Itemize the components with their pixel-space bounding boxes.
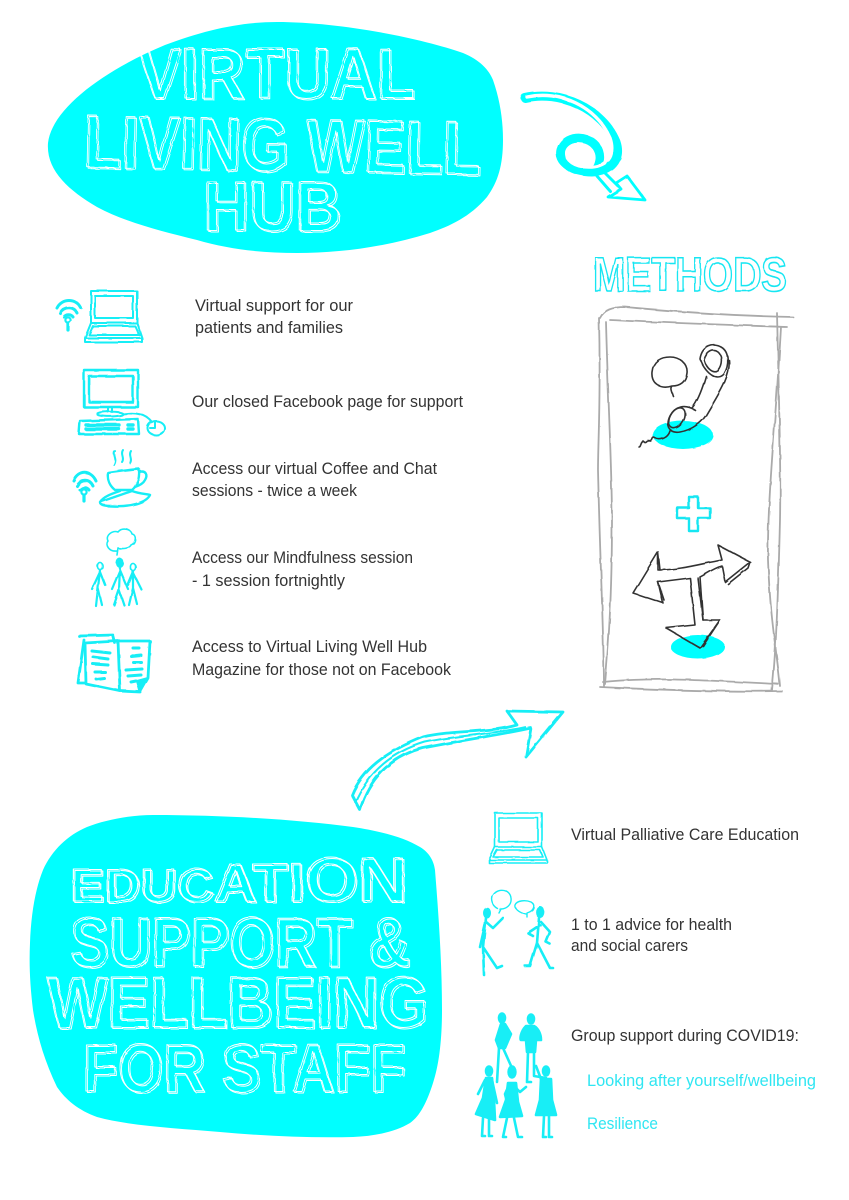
- icon: wifi and laptop: [57, 291, 142, 342]
- heading: Virtual Living Well Hub: VIRTUAL: [138, 35, 415, 114]
- list row: Mindfulness: - 1 session fortnightly: [192, 572, 346, 590]
- text: 1 to 1 advice: 1 to 1 advice for health: [571, 916, 732, 934]
- text: Coffee and Chat: Access our virtual Coffee and Chat: [192, 460, 437, 478]
- icon: desktop computer: [79, 370, 164, 435]
- panel: Virtual Living Well Hub title blob: [48, 22, 503, 253]
- icon: group of silhouettes: [476, 1014, 556, 1137]
- list row: Magazine: Magazine for those not on Facebook: [192, 661, 452, 679]
- text: group support heading: Group support during COVID19:: [571, 1027, 799, 1045]
- list row: Facebook page: [79, 370, 463, 435]
- text: virtual support: Virtual support for our: [195, 297, 353, 315]
- icon: telephone with speech bubble: [639, 345, 729, 449]
- text: looking after yourself: Looking after yourself/wellbeing: [587, 1072, 816, 1090]
- icon: open magazine: [78, 635, 150, 692]
- arrow: curly arrow to methods: [525, 95, 645, 200]
- icon: plus sign: [677, 497, 710, 531]
- list row: Mindfulness: [92, 529, 413, 606]
- list row: virtual support: [57, 291, 353, 342]
- heading: Education Support and Wellbeing for Staff: SUPPORT &: [70, 903, 410, 981]
- icon: laptop: [489, 813, 547, 863]
- heading: Virtual Living Well Hub: HUB: [203, 167, 341, 245]
- text: Mindfulness: Access our Mindfulness session: [192, 549, 413, 567]
- icon: three-way arrow: [633, 545, 750, 659]
- text: Palliative Care Education: Virtual Palliative Care Education: [571, 826, 799, 844]
- heading: Education Support and Wellbeing for Staff: FOR STAFF: [82, 1030, 405, 1106]
- heading: Virtual Living Well Hub: LIVING WELL: [83, 99, 481, 190]
- heading: Education Support and Wellbeing for Staff: EDUCATION: [70, 846, 407, 915]
- heading: Education Support and Wellbeing for Staff: WELLBEING: [47, 963, 428, 1043]
- list row: Coffee and Chat: [74, 450, 437, 506]
- list row: Coffee and Chat: sessions - twice a week: [192, 482, 358, 500]
- list row: group support: [476, 1014, 816, 1137]
- text: resilience: Resilience: [587, 1115, 658, 1133]
- text: Facebook page: Our closed Facebook page for support: [192, 393, 463, 411]
- list row: Palliative Care Education: [489, 813, 799, 863]
- panel: methods sketched frame: [598, 307, 793, 691]
- icon: two figures talking: [480, 890, 553, 975]
- heading: Virtual Living Well Hub: [83, 35, 481, 245]
- list row: Magazine: [78, 635, 452, 692]
- heading: Methods: METHODS: [593, 249, 787, 302]
- arrow: swoosh from staff panel to methods: [352, 711, 563, 810]
- list row: 1 to 1 advice: and social carers: [571, 937, 688, 955]
- heading: Education Support and Wellbeing for Staff: [47, 846, 428, 1106]
- panel: Education Support and Wellbeing title blob: [30, 815, 442, 1137]
- icon: three figures with thought cloud: [92, 529, 141, 606]
- list row: 1 to 1 advice: [480, 890, 732, 975]
- text: Magazine: Access to Virtual Living Well Hub: [192, 638, 427, 656]
- list row: virtual support: patients and families: [195, 319, 343, 337]
- icon: wifi and coffee cup: [74, 450, 150, 506]
